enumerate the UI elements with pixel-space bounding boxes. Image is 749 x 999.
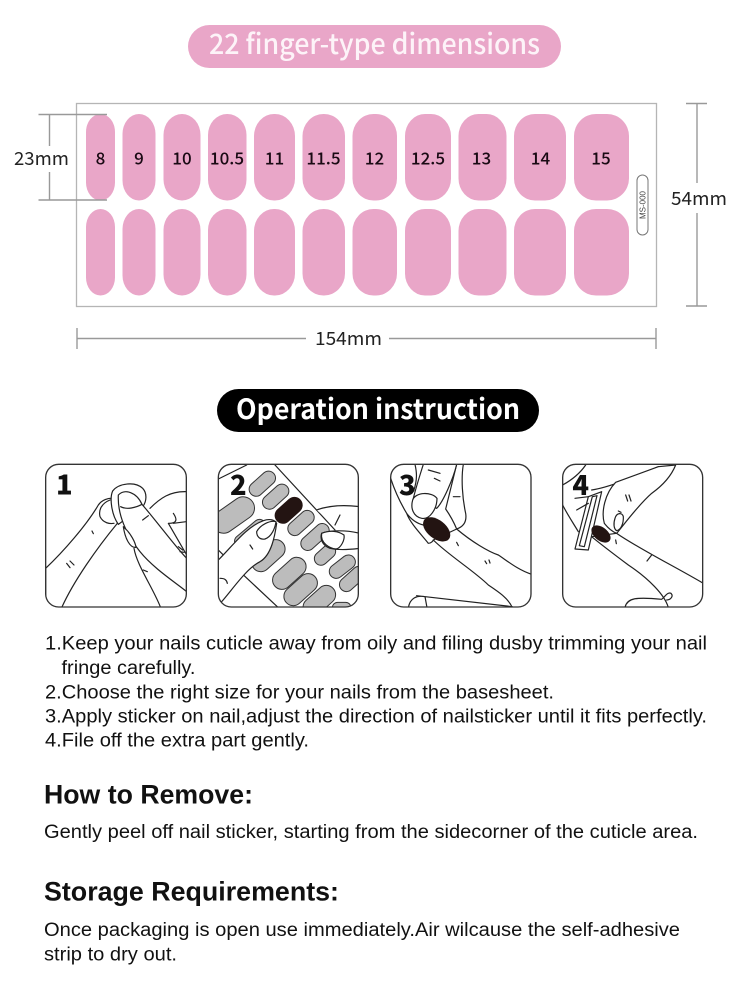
remove instructions: Gently peel off nail sticker, starting from the sidecorner of the cuticle area. xyxy=(44,822,698,843)
operation steps text xyxy=(45,634,707,752)
bottom row of nails xyxy=(86,209,629,296)
storage instructions: Once packaging is open use immediately.Air wilcause the self-adhesive xyxy=(44,920,680,941)
sheet outline xyxy=(76,104,656,306)
step 1 panel xyxy=(46,463,187,608)
dimension: 154mm: 154mm xyxy=(315,325,382,351)
nail sticker sheet diagram xyxy=(76,104,656,306)
heading: Storage Requirements: Storage Requirements: xyxy=(44,876,339,906)
top row of sized nails: 11.5 xyxy=(306,144,341,170)
top row of sized nails xyxy=(86,114,629,200)
top row of sized nails: 8 xyxy=(96,144,105,170)
top row of sized nails: 14 xyxy=(531,144,550,170)
title pill: 22 finger-type dimensions: 22 finger-type dimensions xyxy=(209,23,540,63)
operation steps text: 1.Keep your nails cuticle away from oily and filing dusby trimming your nail xyxy=(45,634,707,654)
dimension: 23mm xyxy=(14,114,107,200)
top row of sized nails: 12 xyxy=(365,144,384,170)
model tag MS-000 xyxy=(637,175,648,235)
top row of sized nails: 12.5 xyxy=(411,144,445,170)
top row of sized nails: 13 xyxy=(472,144,491,170)
storage instructions xyxy=(44,920,680,966)
operation steps text: fringe carefully. xyxy=(62,658,196,679)
operation steps text: 2.Choose the right size for your nails from the basesheet. xyxy=(45,682,554,703)
dimension: 154mm xyxy=(77,325,656,351)
step 3 panel xyxy=(391,463,532,608)
step 2 panel xyxy=(218,464,359,608)
step number 1: 1 xyxy=(56,463,73,503)
top row of sized nails: 11 xyxy=(265,144,284,170)
step number 4: 4 xyxy=(572,463,589,503)
operation steps text: 3.Apply sticker on nail,adjust the direction of nailsticker until it fits perfectly. xyxy=(45,707,707,728)
top row of sized nails: 10 xyxy=(172,144,192,170)
step 4 panel xyxy=(563,463,703,608)
step number 3: 3 xyxy=(399,463,416,503)
top row of sized nails: 15 xyxy=(591,144,611,170)
dimension: 23mm: 23mm xyxy=(14,145,69,171)
heading: How to Remove: How to Remove: xyxy=(44,780,253,810)
storage instructions: strip to dry out. xyxy=(44,944,177,966)
top row of sized nails: 10.5 xyxy=(210,144,244,170)
operation steps text: 4.File off the extra part gently. xyxy=(45,731,309,752)
heading pill: Operation instruction: Operation instruction xyxy=(236,387,520,427)
top row of sized nails: 9 xyxy=(134,144,144,170)
step number 2: 2 xyxy=(230,463,247,503)
dimension: 54mm: 54mm xyxy=(671,185,727,211)
dimension: 54mm xyxy=(671,104,727,306)
model tag MS-000: MS-000 xyxy=(638,190,648,219)
